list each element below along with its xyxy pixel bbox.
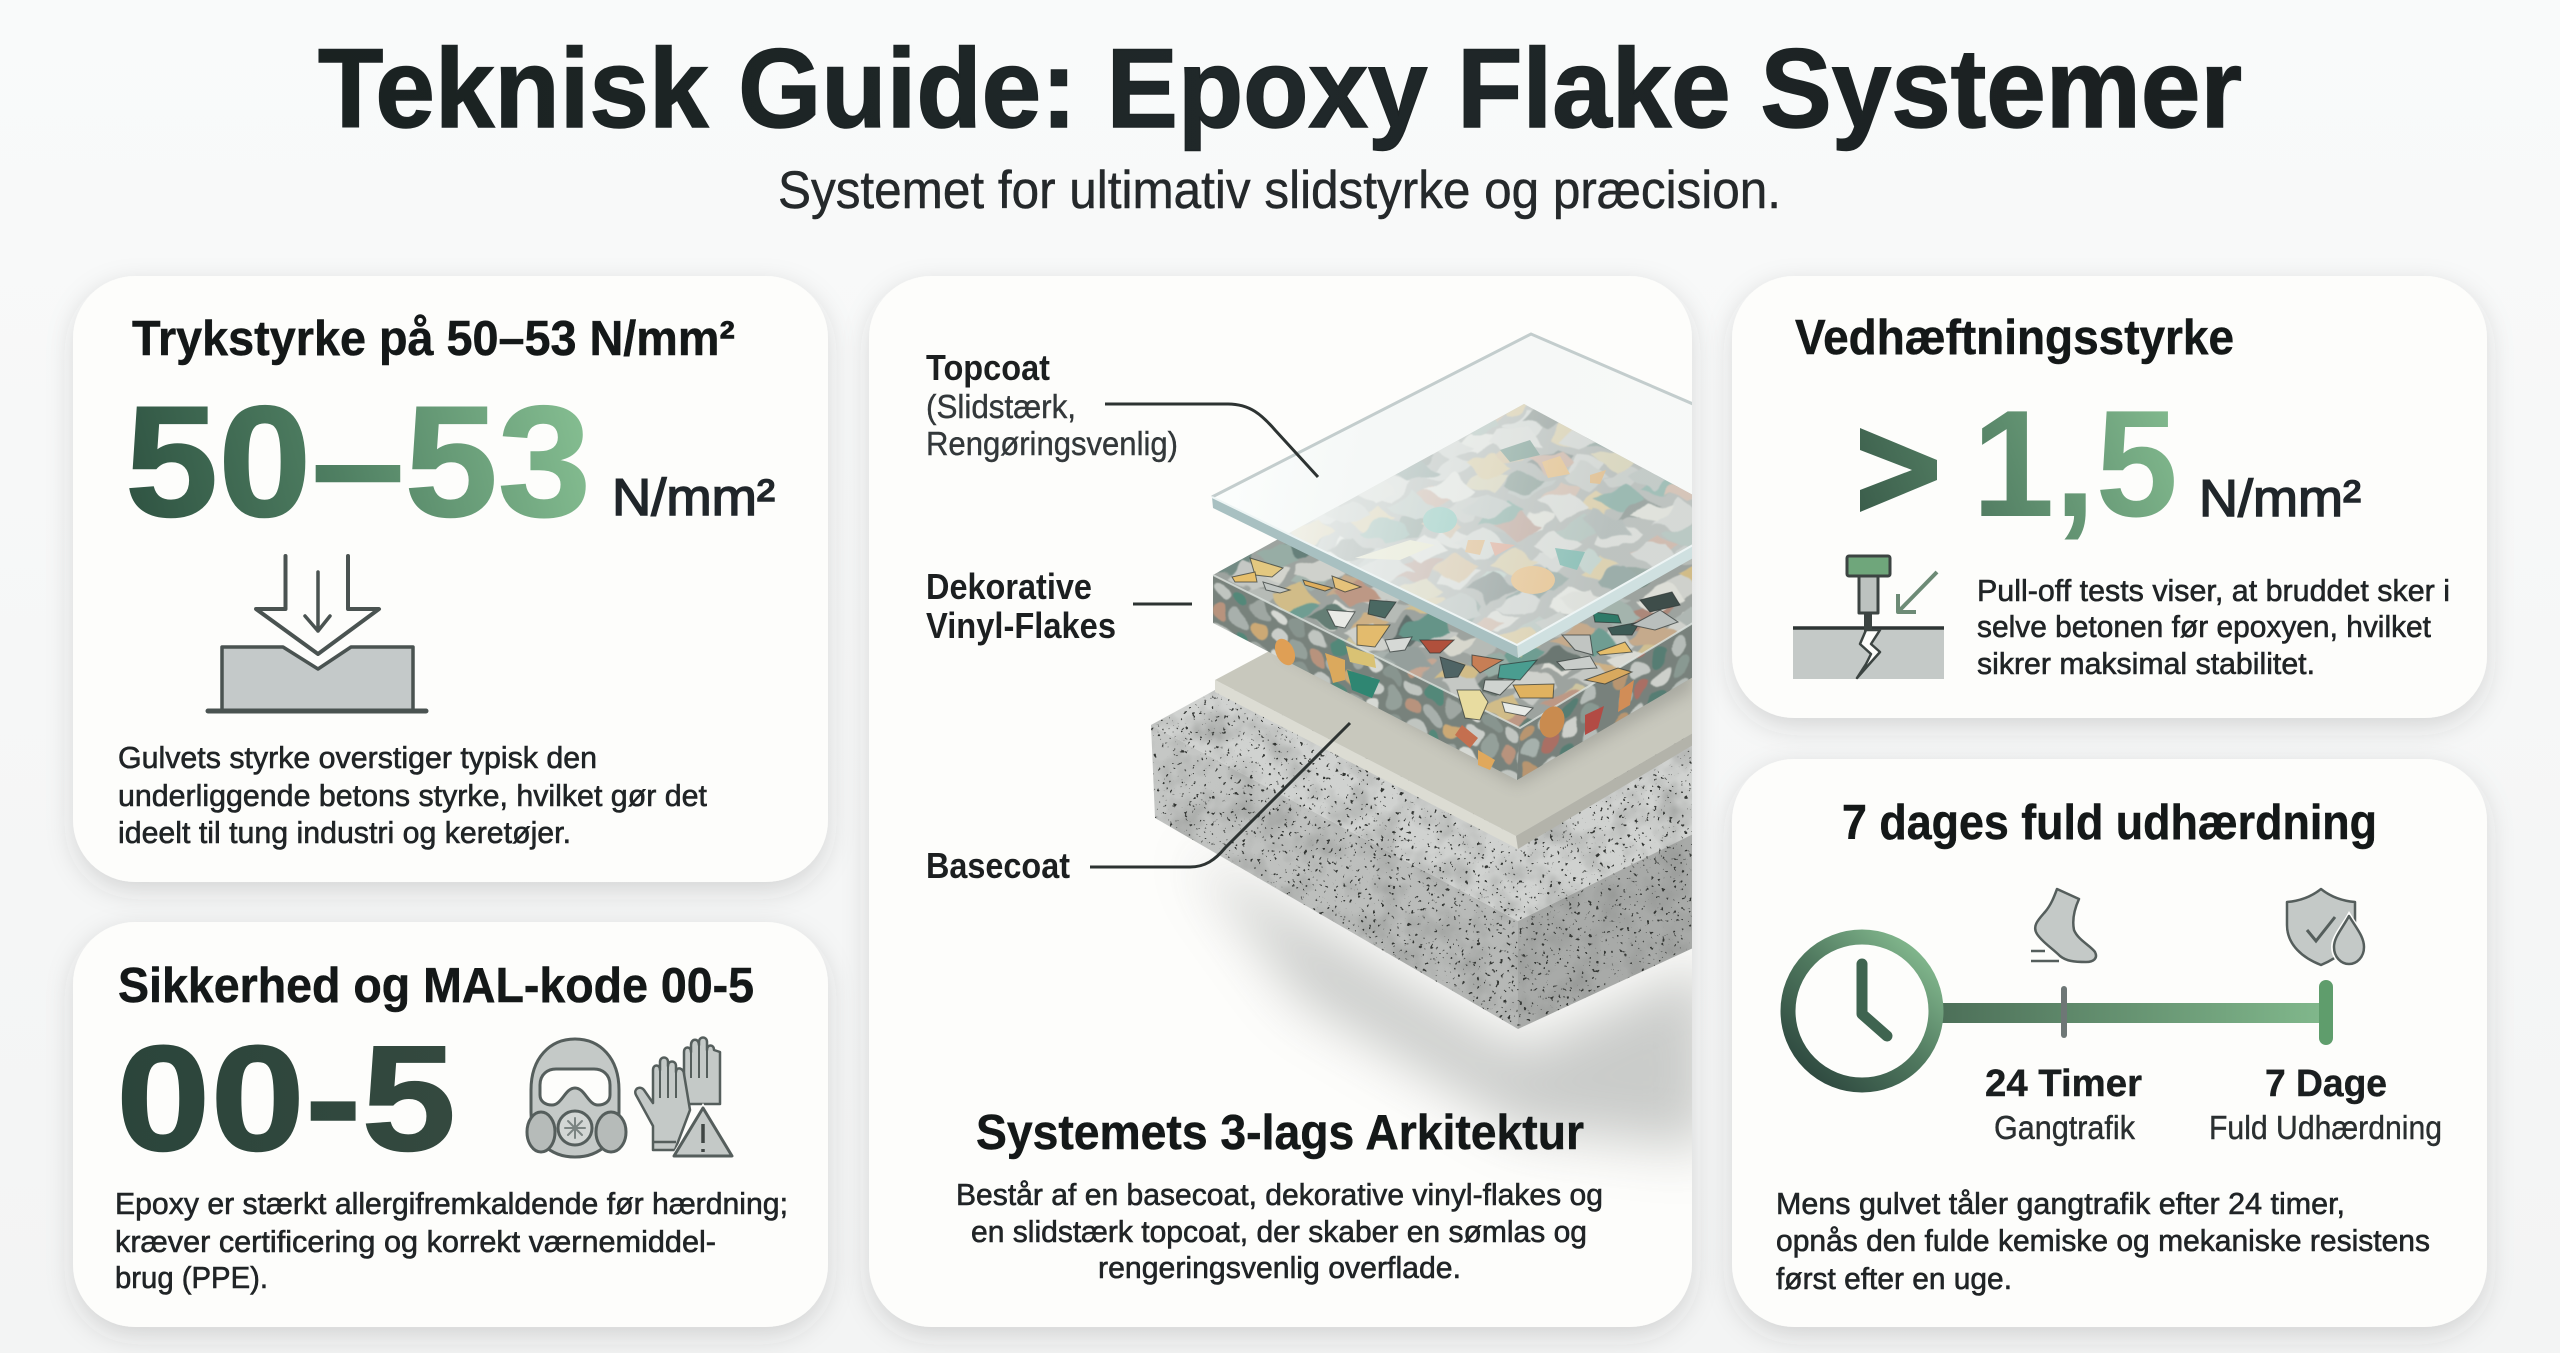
panel: sikkerhed [73, 922, 828, 1327]
concrete shadow [1190, 850, 1710, 1150]
heading: vedhæftning: Vedhæftningsstyrke [1795, 311, 2234, 365]
body text: sikkerhed [115, 1186, 788, 1295]
callout: vinyl flakes [926, 566, 1192, 646]
body text: vedhæftning [1977, 573, 2450, 681]
label: 7 dage: 7 Dage [2265, 1063, 2387, 1105]
callout: vinyl flakes: Dekorative [926, 566, 1092, 607]
callout: topcoat: Rengøringsvenlig) [926, 425, 1178, 462]
body text: trykstyrke: Gulvets styrke overstiger typisk den [118, 740, 597, 775]
callout: basecoat [926, 723, 1350, 886]
callout: topcoat: Topcoat [926, 347, 1050, 388]
big number: 50–53: 50–53 [125, 374, 591, 550]
body text: arkitektur: rengeringsvenlig overflade. [1098, 1250, 1461, 1285]
body text: udhærdning: Mens gulvet tåler gangtrafik efter 24 timer, [1776, 1186, 2345, 1221]
icon: foot [2031, 889, 2096, 962]
big number: >1,5: 1,5 [1972, 379, 2178, 549]
body text: sikkerhed: brug (PPE). [115, 1260, 268, 1295]
heading: udhærdning: 7 dages fuld udhærdning [1842, 796, 2377, 850]
heading: sikkerhed: Sikkerhed og MAL-kode 00-5 [118, 959, 754, 1013]
body text: arkitektur: Består af en basecoat, dekorative vinyl-flakes og [956, 1177, 1603, 1212]
body text: arkitektur: en slidstærk topcoat, der skaber en sømlas og [971, 1214, 1587, 1249]
heading: arkitektur: Systemets 3-lags Arkitektur [976, 1106, 1584, 1160]
icon: shield with drop [2287, 889, 2367, 967]
timeline: curing progress [1788, 937, 2333, 1085]
marker: 7 dage [2319, 980, 2333, 1045]
label: 24 timer: Gangtrafik [1994, 1109, 2135, 1146]
title: Teknisk Guide: Epoxy Flake Systemer [318, 26, 2242, 151]
icon: clock [1788, 937, 1936, 1085]
icon: gloves and warning triangle [635, 1038, 737, 1160]
icon: compression arrow on block [208, 556, 426, 711]
panel: udhærdning [1732, 759, 2487, 1327]
label: 24 timer: 24 Timer [1985, 1063, 2142, 1105]
label: 7 dage: Fuld Udhærdning [2209, 1109, 2442, 1146]
layer diagram: exploded 3-layer floor [1151, 334, 1710, 1150]
panel: vedhæftning [1732, 276, 2487, 718]
body text: vedhæftning: selve betonen før epoxyen, hvilket [1977, 609, 2431, 644]
glass topcoat [1212, 334, 1693, 658]
body text: udhærdning: opnås den fulde kemiske og mekaniske resistens [1776, 1223, 2430, 1258]
big number: >1,5 [1860, 379, 2178, 549]
unit: N/mm²: N/mm² [612, 469, 775, 527]
decorative flake layer [1212, 404, 1692, 780]
callout: topcoat: (Slidstærk, [926, 388, 1076, 425]
big code: 00-5: 00-5 [116, 1014, 456, 1182]
marker: 24 timer [2061, 986, 2067, 1038]
unit: N/mm²: N/mm² [2199, 470, 2361, 528]
label: 24 timer [1985, 1063, 2142, 1146]
body text: trykstyrke: ideelt til tung industri og keretøjer. [118, 815, 571, 850]
concrete slab [1151, 690, 1693, 1029]
heading: trykstyrke: Trykstyrke på 50–53 N/mm² [132, 312, 735, 366]
callout: topcoat [926, 347, 1318, 477]
body text: vedhæftning: sikrer maksimal stabilitet. [1977, 646, 2315, 681]
panel: arkitektur [869, 276, 1710, 1327]
body text: trykstyrke: underliggende betons styrke, hvilket gør det [118, 778, 707, 813]
body text: trykstyrke [118, 740, 707, 850]
body text: vedhæftning: Pull-off tests viser, at bruddet sker i [1977, 573, 2450, 608]
body text: udhærdning [1776, 1186, 2430, 1296]
basecoat layer [1215, 652, 1692, 849]
panel: trykstyrke [73, 276, 828, 882]
subtitle: Systemet for ultimativ slidstyrke og præcision. [778, 161, 1781, 220]
label: 7 dage [2209, 1063, 2442, 1146]
callout: basecoat: Basecoat [926, 845, 1070, 886]
body text: arkitektur [956, 1177, 1603, 1285]
body text: udhærdning: først efter en uge. [1776, 1261, 2012, 1296]
body text: sikkerhed: kræver certificering og korrekt værnemiddel- [115, 1224, 716, 1259]
callout: vinyl flakes: Vinyl-Flakes [926, 605, 1116, 646]
timeline bar [1942, 1003, 2322, 1023]
icon: pull-off test with crack [1793, 556, 1944, 679]
body text: sikkerhed: Epoxy er stærkt allergifremkaldende før hærdning; [115, 1186, 788, 1221]
icon: respirator mask [527, 1039, 626, 1157]
